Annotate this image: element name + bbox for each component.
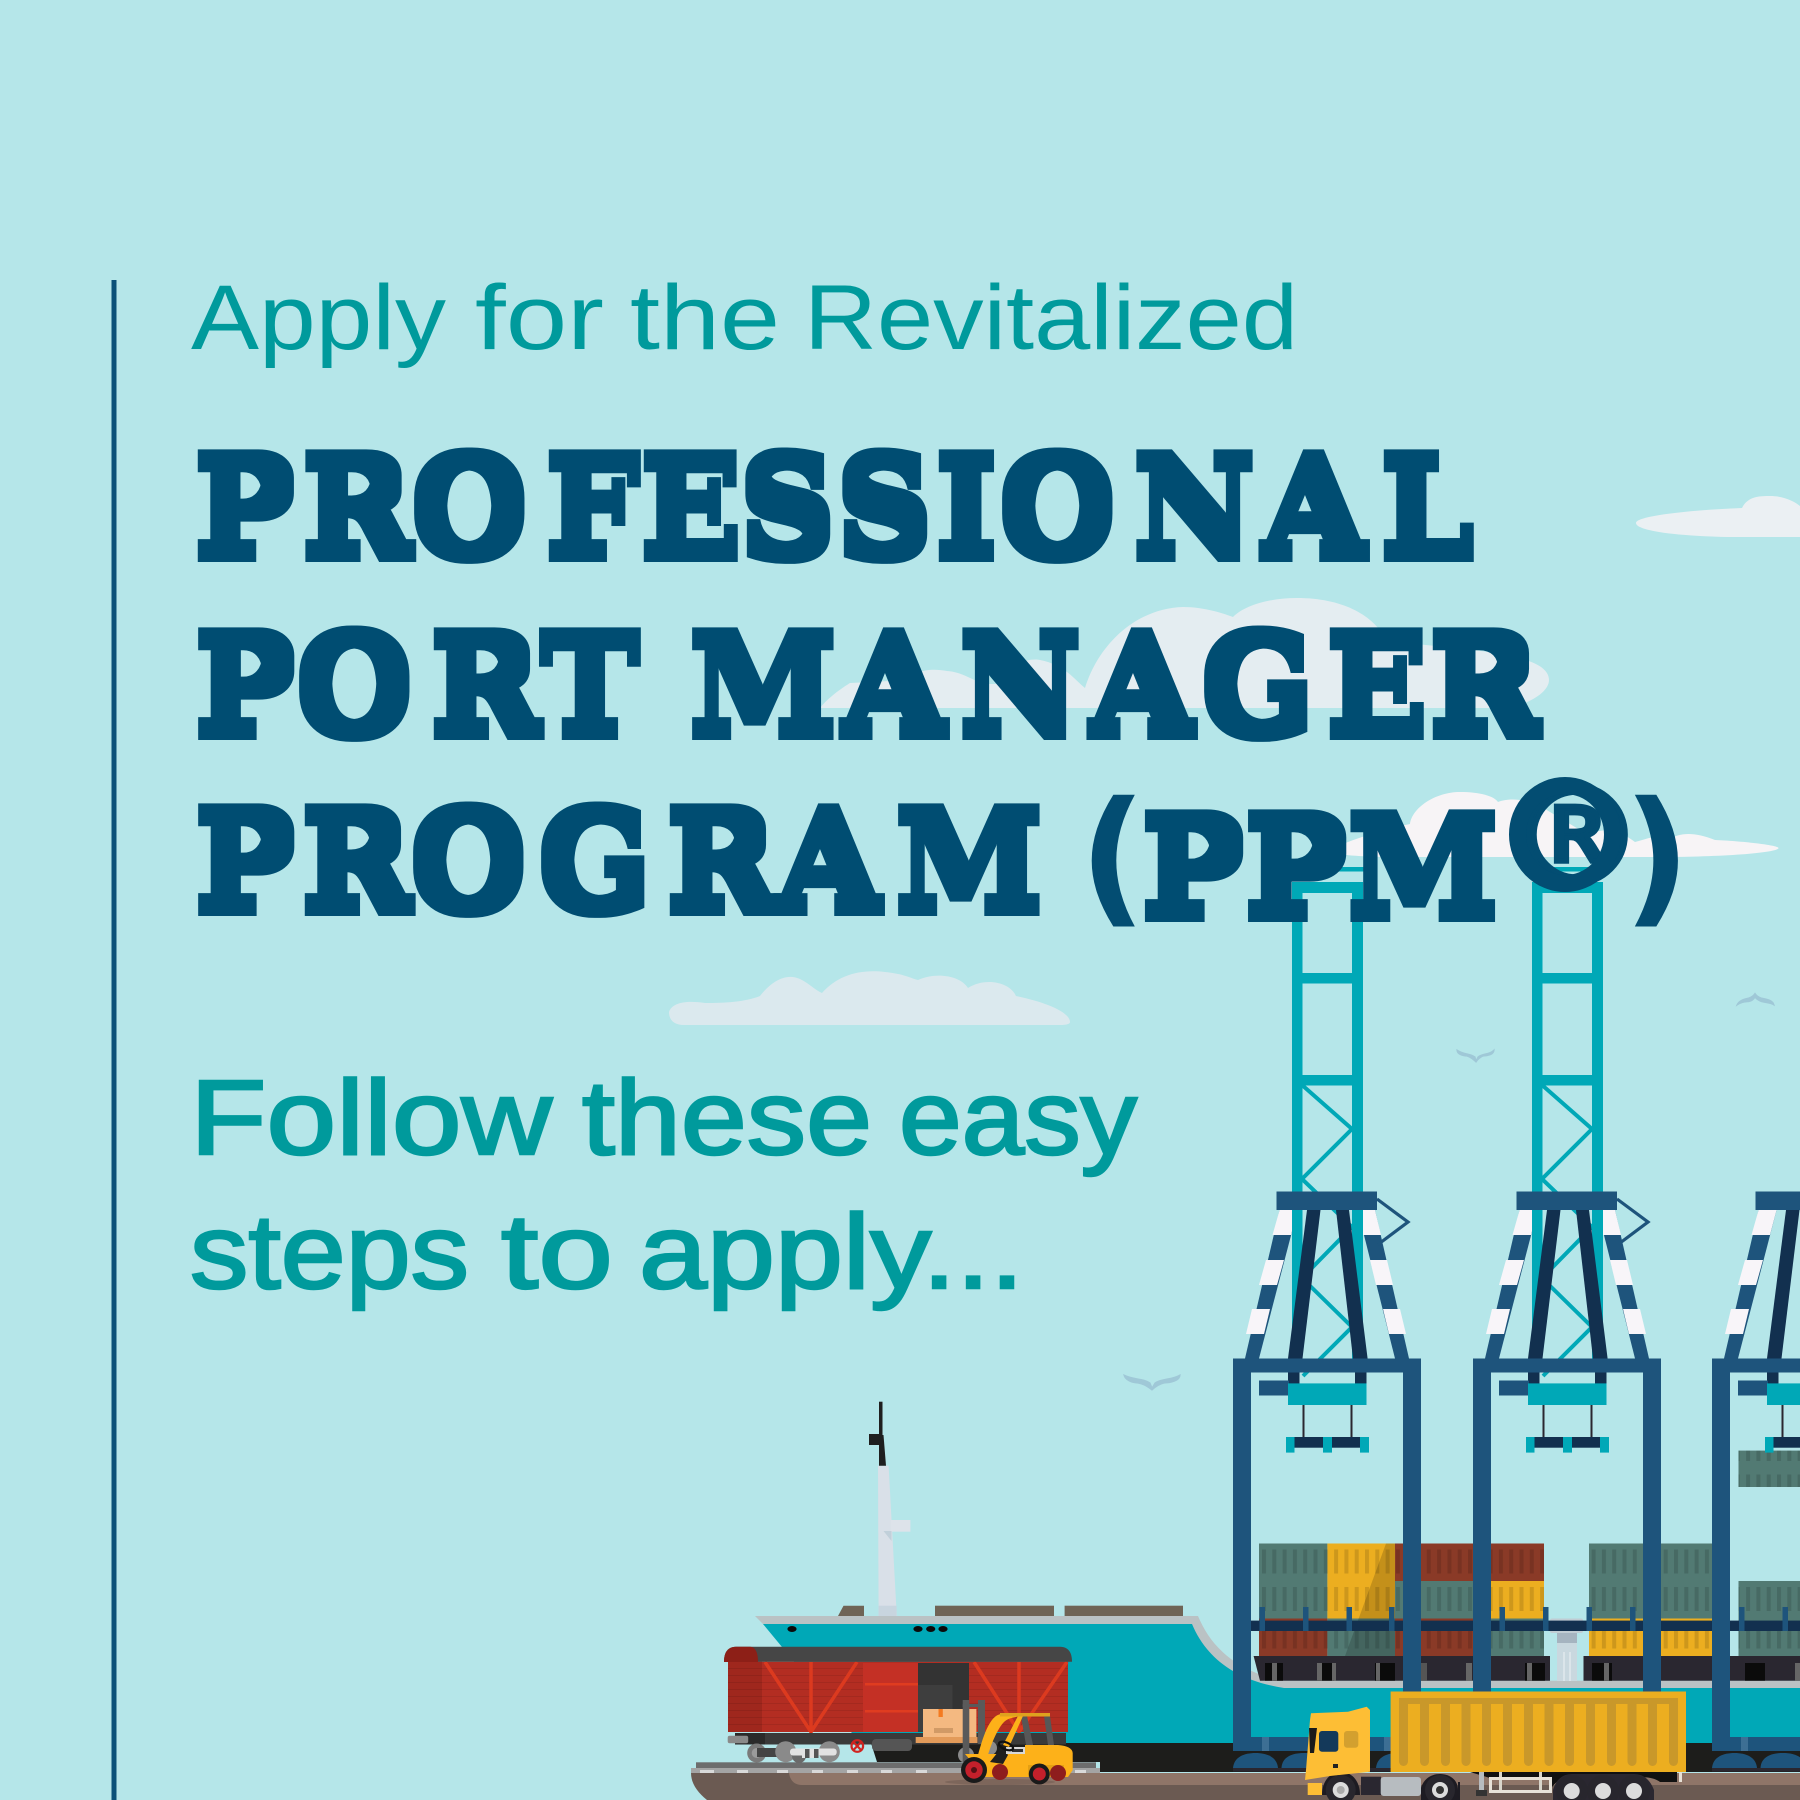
- title line 3: PROGRAM: [194, 782, 1043, 940]
- call to action line 1: easy: [899, 1059, 1137, 1177]
- forklift: [958, 1700, 1073, 1784]
- ship deck edge: [755, 1616, 1800, 1692]
- truck container: [1391, 1692, 1686, 1772]
- crane 2 lattice tower: [1532, 867, 1605, 1376]
- call to action line 1: Follow: [190, 1059, 553, 1177]
- call to action line 2: apply...: [639, 1193, 1024, 1311]
- container deck: [1254, 1656, 1800, 1681]
- cloud: top right: [1636, 496, 1800, 537]
- crane 2 outer legs: [1485, 1210, 1649, 1358]
- stacked containers: [1259, 1451, 1800, 1656]
- forklift body: [965, 1745, 1073, 1777]
- call to action: [190, 1059, 1137, 1311]
- ship deck cargo covers: [838, 1606, 1183, 1616]
- ship mast: [869, 1402, 910, 1616]
- crane 2 gantry: [1499, 1192, 1648, 1453]
- intro word: Revitalized: Revitalized: [804, 267, 1298, 369]
- call to action line 2: [190, 1193, 1024, 1311]
- wagon brake wheel: [852, 1740, 863, 1752]
- ship portholes: [787, 1626, 948, 1632]
- wagon body: [728, 1662, 1068, 1732]
- wagon underframe: [728, 1733, 1066, 1751]
- closing parenthesis: ): [1623, 770, 1691, 942]
- dock ground: [691, 1773, 1800, 1800]
- crane 3 outer legs: [1724, 1210, 1800, 1358]
- PPM: PPM: [1141, 788, 1499, 946]
- truck cab: [1305, 1707, 1370, 1795]
- ship hull: [763, 1624, 1800, 1743]
- forklift pillars: [978, 1713, 1054, 1755]
- cloud: behind port manager: [820, 598, 1549, 708]
- intro word: Apply: Apply: [191, 267, 446, 369]
- title punctuation: [1079, 758, 1691, 942]
- crane frame 2: [1473, 1358, 1661, 1772]
- registered mark: ®: [1509, 758, 1644, 916]
- crane frame 1: [1233, 1358, 1421, 1772]
- intro heading: [191, 267, 1298, 369]
- intro word: for: for: [475, 267, 604, 369]
- cargo box on pallet: [916, 1709, 978, 1743]
- walkway rail: [1251, 1607, 1800, 1631]
- box wagon: [724, 1647, 1072, 1763]
- call to action line 1: [190, 1059, 1137, 1177]
- opening parenthesis: (: [1079, 770, 1147, 942]
- truck wheels: [1326, 1774, 1654, 1800]
- crane frame 3: [1712, 1358, 1800, 1772]
- crane 3 gantry: [1738, 1192, 1800, 1453]
- bird: right: [1737, 994, 1774, 1005]
- railway track: [691, 1762, 1100, 1773]
- wagon door: [863, 1663, 969, 1732]
- vertical rule: [112, 280, 116, 1800]
- call to action line 2: steps: [190, 1193, 469, 1311]
- bird: centre: [1457, 1050, 1494, 1062]
- bird: lower left: [1124, 1375, 1180, 1390]
- title: [194, 428, 1542, 946]
- wagon bracing: [765, 1662, 1067, 1732]
- forklift mast: [958, 1700, 997, 1763]
- cargo ship: [755, 1402, 1800, 1772]
- crane 1 gantry: [1259, 1192, 1408, 1453]
- call to action line 1: these: [582, 1059, 872, 1177]
- wagon roof: [724, 1647, 1072, 1662]
- cloud: behind PPM: [1329, 792, 1779, 857]
- title line 2: PORT MANAGER: [194, 606, 1542, 764]
- wagon bogie: [747, 1741, 840, 1763]
- crane 1 lattice tower: [1292, 867, 1365, 1376]
- articulated truck: [1305, 1692, 1686, 1800]
- ship funnel: [1550, 1618, 1583, 1681]
- title line 1: PROFESSIONAL: [194, 428, 1474, 586]
- ship keel: [871, 1743, 1800, 1772]
- truck chassis: [1322, 1772, 1682, 1800]
- crane 1 outer legs: [1245, 1210, 1409, 1358]
- cloud: lower: [669, 971, 1070, 1025]
- forklift seat and steering wheel: [990, 1740, 1025, 1764]
- intro word: the: the: [630, 267, 780, 369]
- forklift wheels: [961, 1757, 1066, 1784]
- call to action line 2: to: [501, 1193, 613, 1311]
